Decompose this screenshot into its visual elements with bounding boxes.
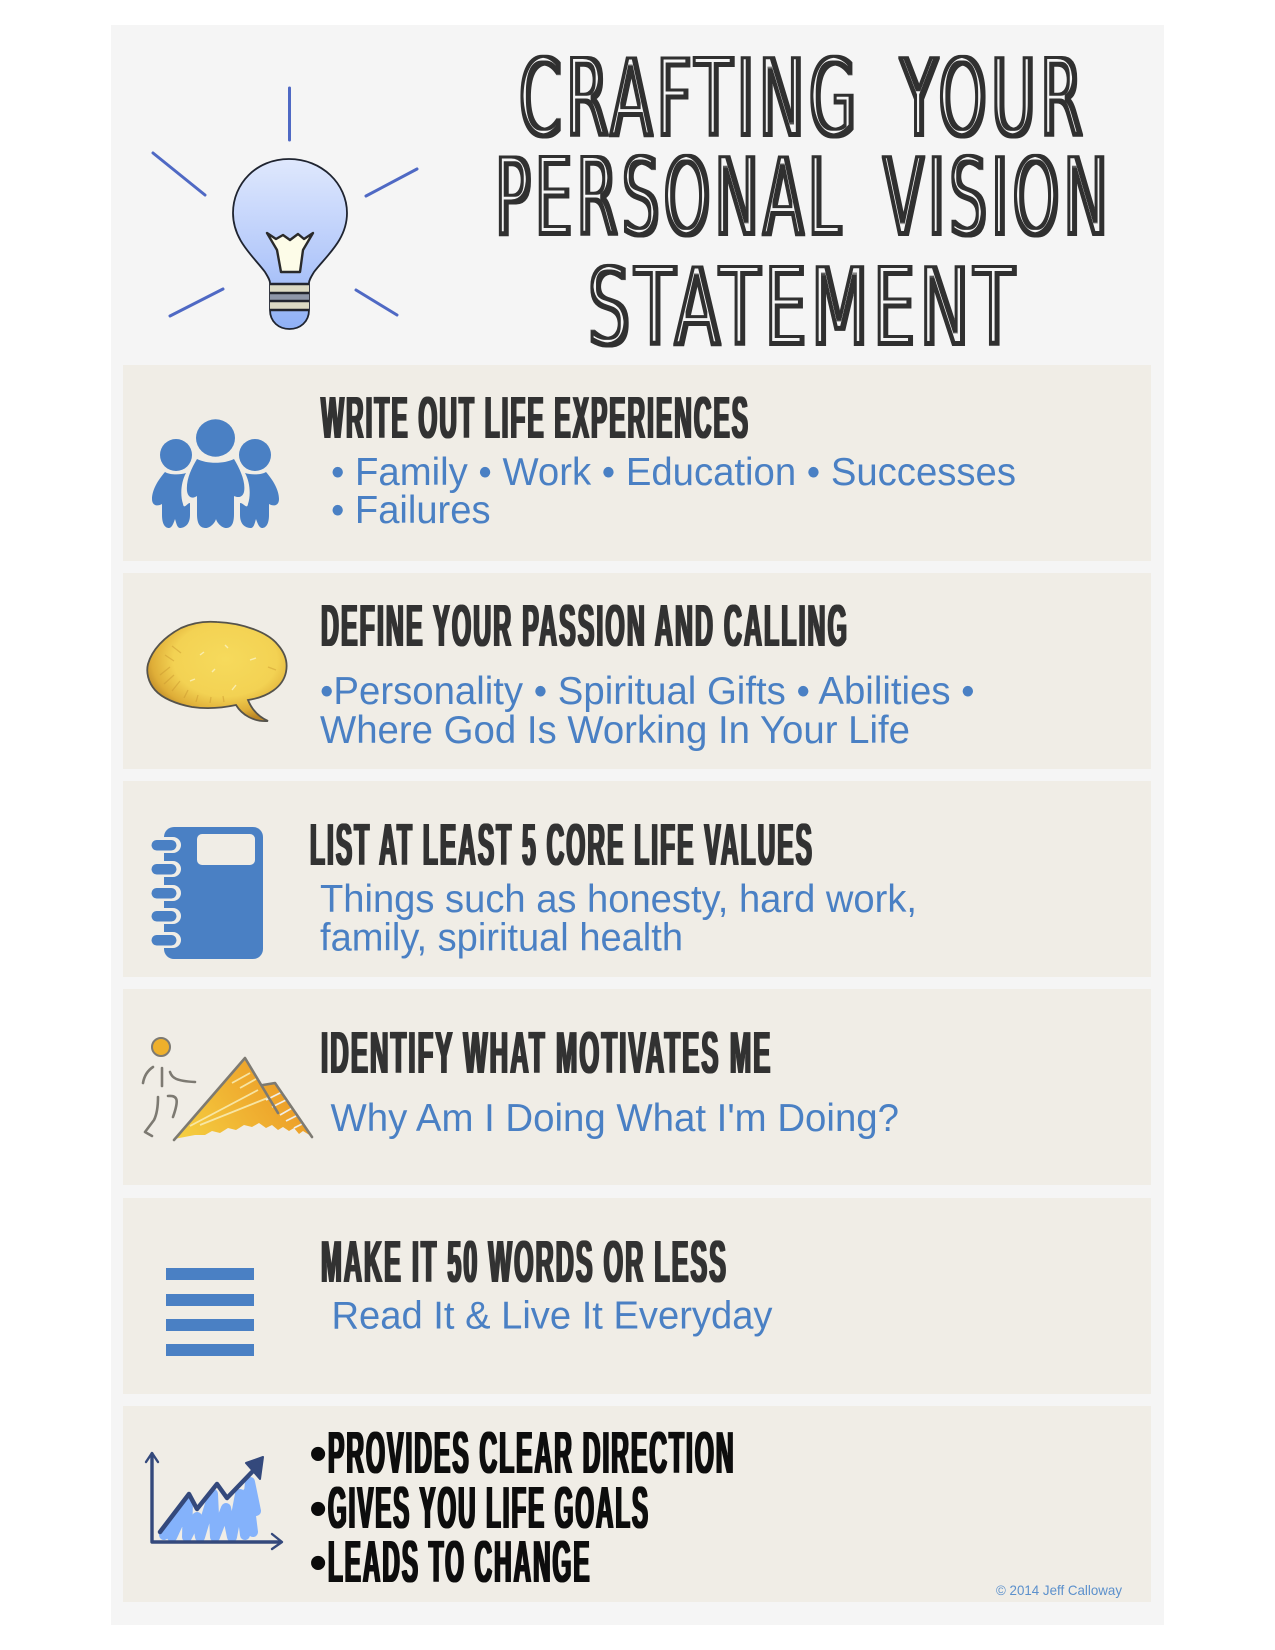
panel: make it 50 words or less: MAKE IT 50 WORDS OR LESS bbox=[321, 1228, 728, 1295]
icon: speech bubble bbox=[147, 622, 287, 721]
panel: make it 50 words or less bbox=[123, 1198, 1151, 1394]
text block: • Family • Work • Education • Successes bbox=[331, 451, 1016, 494]
panel: define your passion and calling bbox=[123, 573, 1151, 769]
panel: write out life experiences bbox=[123, 365, 1151, 561]
icon: group of people bbox=[152, 419, 279, 528]
icon: hiker and mountain bbox=[143, 1038, 312, 1140]
text block: •Personality • Spiritual Gifts • Abilities • bbox=[320, 670, 975, 713]
text block bbox=[331, 451, 1016, 532]
heading list: • bbox=[309, 1534, 327, 1592]
panel: benefits bbox=[123, 1406, 1151, 1602]
heading list: LEADS TO CHANGE bbox=[328, 1528, 592, 1595]
heading list: • bbox=[309, 1480, 327, 1538]
text block bbox=[320, 670, 975, 752]
heading list bbox=[309, 1419, 736, 1595]
icon: text lines bbox=[166, 1268, 254, 1356]
text block: Why Am I Doing What I'm Doing? bbox=[330, 1097, 899, 1140]
text block: Read It & Live It Everyday bbox=[332, 1294, 773, 1338]
text block bbox=[320, 878, 917, 960]
text block: family, spiritual health bbox=[320, 916, 683, 960]
title: STATEMENT bbox=[588, 246, 1019, 371]
copyright: © 2014 Jeff Calloway bbox=[996, 1582, 1122, 1598]
text block: • Failures bbox=[331, 489, 490, 532]
icon: light bulb bbox=[153, 88, 417, 329]
text block: Where God Is Working In Your Life bbox=[320, 709, 910, 752]
text block: Things such as honesty, hard work, bbox=[320, 878, 917, 921]
heading list: GIVES YOU LIFE GOALS bbox=[328, 1474, 650, 1541]
heading list: • bbox=[309, 1425, 327, 1483]
icon: rising chart bbox=[146, 1453, 282, 1549]
panel: list core values bbox=[123, 781, 1151, 977]
icon: notebook bbox=[151, 827, 263, 959]
panel: identify what motivates me bbox=[123, 989, 1151, 1185]
title bbox=[495, 37, 1112, 371]
